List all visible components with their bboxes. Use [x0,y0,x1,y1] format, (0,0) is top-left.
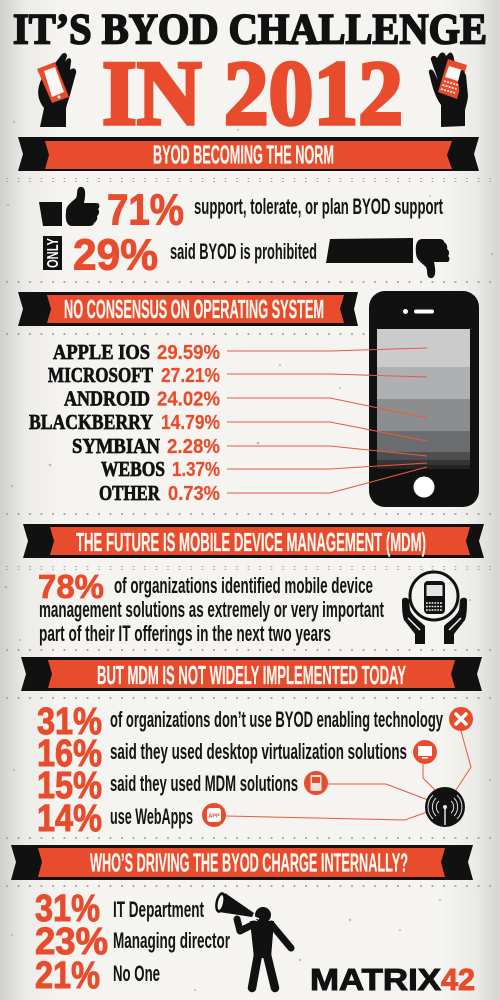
stat row: 29 percent prohibited [43,230,449,280]
implementation stats: 14% [37,798,102,840]
os list: labels and values: WEBOS [101,457,165,481]
os list: labels and values: 29.59% [157,342,220,364]
label: only [43,236,62,270]
icon: left hand holding smartphone [37,53,76,127]
leader lines [227,348,427,493]
stat row: 71 percent support [39,186,443,234]
implementation stats: 31% [37,701,102,743]
os list: labels and values: SYMBIAN [72,434,160,458]
driver stats [35,888,230,997]
logo: Matrix42: MATRIX [310,962,441,997]
text: prohibited statement: said BYOD is prohibited [170,239,317,264]
icon: app: APP [208,814,220,820]
icon: antenna signal [425,787,465,827]
label: only: ONLY [45,238,62,268]
driver stats: 31% [35,888,100,930]
icon: cross [449,707,473,731]
banner: who's driving the BYOD charge [11,845,473,880]
icon: mobile device [304,771,328,795]
banner: no consensus on operating system [18,292,358,326]
implementation stats: 16% [37,733,102,775]
stat: 71%: 71% [107,186,184,234]
driver stats: 21% [35,955,100,997]
icon: hands holding phone [402,572,467,644]
os list: labels and values: MICROSOFT [48,363,153,387]
driver stats: No One [113,961,160,986]
os list: labels and values: 2.28% [167,436,220,458]
driver stats: 23% [35,921,108,963]
icon: app [202,803,226,827]
icon: right hand holding blackberry [429,52,468,127]
driver stats: Managing director [113,928,230,953]
banner: BYOD becoming the norm [18,137,479,171]
os list: labels and values: 0.73% [168,483,220,505]
os list: labels and values: 14.79% [161,412,220,434]
os list: labels and values: 27.21% [161,365,220,387]
icon: person with megaphone [213,891,291,988]
logo: Matrix42: 42 [441,962,475,997]
icon: thumbs down [326,238,449,278]
implementation stats: 15% [37,765,102,807]
os list: labels and values: ANDROID [64,386,150,410]
phone chart: operating system share [369,291,479,507]
os list: labels and values: BLACKBERRY [29,410,153,434]
os list: labels and values: 1.37% [172,459,220,481]
connector lines to antenna [226,731,471,820]
stat: 78%: 78% [38,568,104,605]
os list: labels and values: APPLE IOS [53,340,150,364]
implementation stats: said they used MDM solutions [110,771,298,796]
os list: labels and values: OTHER [99,481,161,505]
os list: labels and values: 24.02% [157,388,220,410]
text: MDM statement [39,573,384,646]
icon: monitor [413,740,437,764]
text: MDM statement: part of their IT offerings in the next two years [39,621,331,646]
icon: thumbs up [39,187,99,226]
implementation stats [37,701,443,840]
stat: 29%: 29% [73,230,158,280]
subtitle: in 2012: IN 2012 [102,42,403,144]
os list: labels and values [29,340,220,505]
driver stats: IT Department [113,897,204,922]
implementation stats: use WebApps [110,804,193,829]
